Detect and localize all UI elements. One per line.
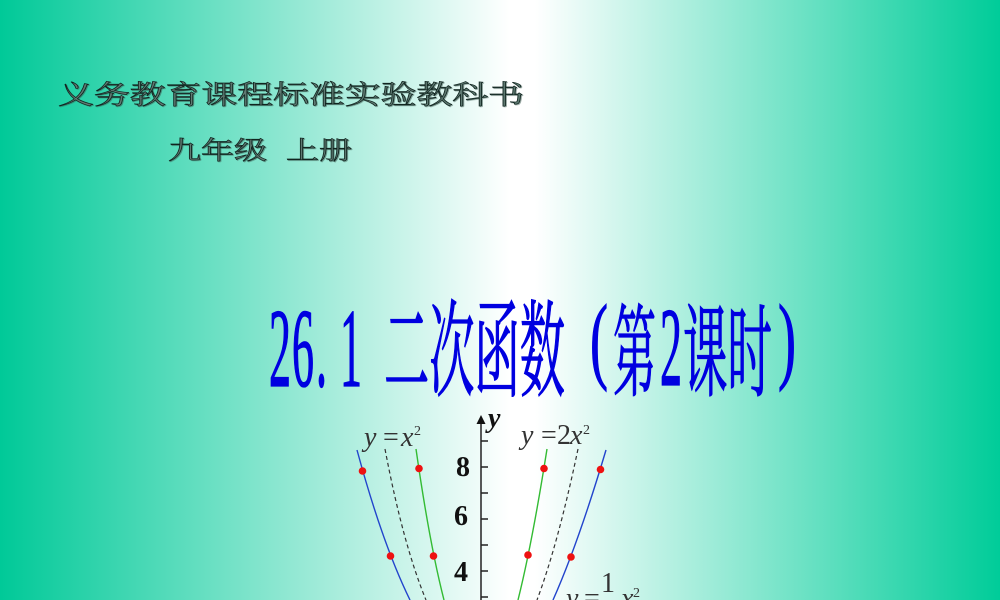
axis numbers: 8 xyxy=(456,452,470,483)
equation label: y = 2x squared: x xyxy=(569,420,583,451)
grade and volume line: 上册 xyxy=(286,137,352,165)
axis numbers: 4 xyxy=(454,557,468,588)
axis numbers: 6 xyxy=(454,501,468,532)
axis numbers xyxy=(454,452,470,588)
equation label: y = 2x squared: = xyxy=(541,420,557,451)
curve: dashed reference parabola, left and right xyxy=(385,449,578,600)
equation label: y = x squared: 2 xyxy=(414,424,421,439)
main title: 2 xyxy=(269,287,291,411)
equation label: y = one half x squared: 1 xyxy=(601,568,615,599)
equation label: y = one half x squared xyxy=(563,568,640,600)
equation label: y = x squared: y xyxy=(361,422,377,453)
main title: 课时 xyxy=(683,300,772,411)
parabola chart xyxy=(357,403,640,600)
grade and volume line xyxy=(168,137,352,165)
equation label: y = x squared: = xyxy=(383,422,399,453)
equation label: y = 2x squared: 2 xyxy=(557,420,571,451)
equation label: y = x squared: x xyxy=(400,422,414,453)
equation label: y = 2x squared: 2 xyxy=(583,423,590,438)
y axis label: y xyxy=(485,403,501,434)
red data points xyxy=(359,465,604,561)
equation label: y = 2x squared: y xyxy=(518,420,534,451)
main title xyxy=(269,286,796,411)
main title: 1 xyxy=(340,287,362,411)
y axis with arrow and ticks xyxy=(476,415,488,600)
curve: y = 2x squared, left and right xyxy=(416,449,547,600)
equation label: y = x squared xyxy=(361,422,421,453)
main title: . xyxy=(316,287,327,411)
main title: 2 xyxy=(660,286,682,410)
equation label: y = 2x squared xyxy=(518,420,590,451)
main title: ) xyxy=(778,287,796,393)
main title: 6 xyxy=(292,287,314,411)
curve: y = x squared, left and right xyxy=(357,450,606,600)
textbook series heading: 义务教育课程标准实验教科书 xyxy=(58,80,524,110)
main title: 第 xyxy=(613,300,656,411)
main title: 二次函数 xyxy=(384,295,565,411)
grade and volume line: 九年级 xyxy=(168,137,267,165)
main title: ( xyxy=(590,287,608,393)
